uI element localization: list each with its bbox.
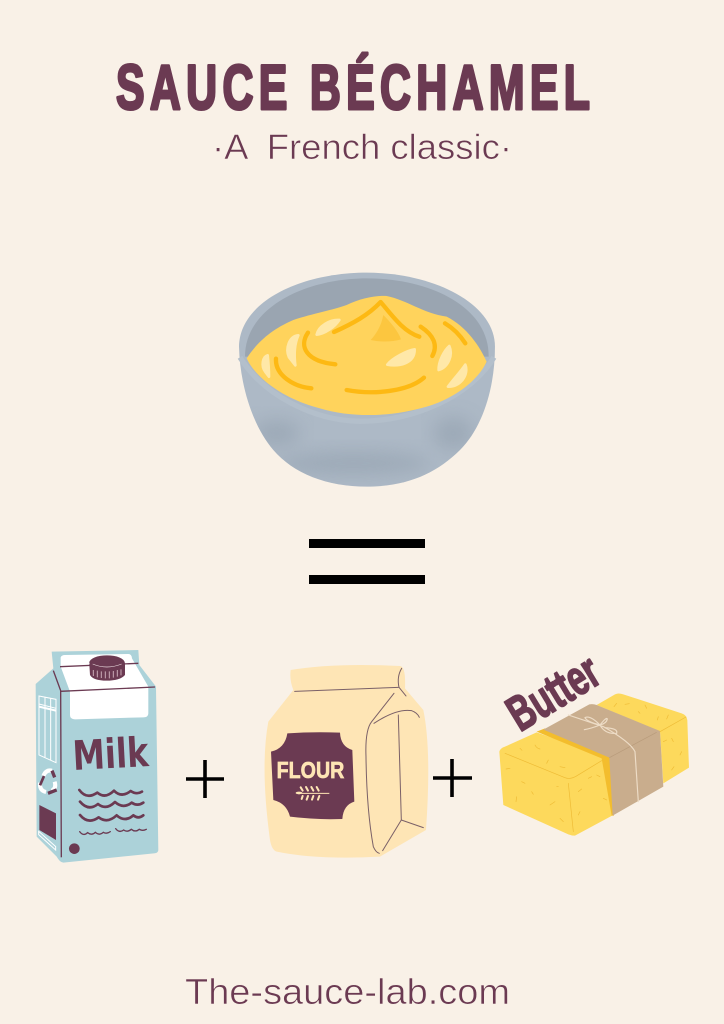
milk label: Milk [71, 728, 150, 780]
footer website: The-sauce-lab.com [185, 971, 510, 1012]
twine [568, 715, 638, 802]
butter label: Butter [497, 644, 610, 742]
icon: milk carton [36, 650, 158, 863]
plus sign 1 [186, 760, 224, 798]
icon: bowl of bechamel sauce [239, 273, 495, 487]
flour label: FLOUR [277, 757, 344, 783]
plus sign 2 [433, 759, 472, 797]
carton cap [89, 655, 125, 681]
icon: butter block [497, 644, 689, 836]
milk waves [79, 790, 143, 821]
icon: flour bag [265, 665, 428, 858]
dark panel [39, 805, 56, 840]
flour label [271, 732, 354, 819]
recycling symbol [40, 770, 57, 793]
side window [39, 696, 56, 763]
subtitle: ·A French classic· [212, 128, 512, 167]
title: SAUCE BÉCHAMEL [116, 53, 590, 123]
equals sign [309, 539, 425, 584]
